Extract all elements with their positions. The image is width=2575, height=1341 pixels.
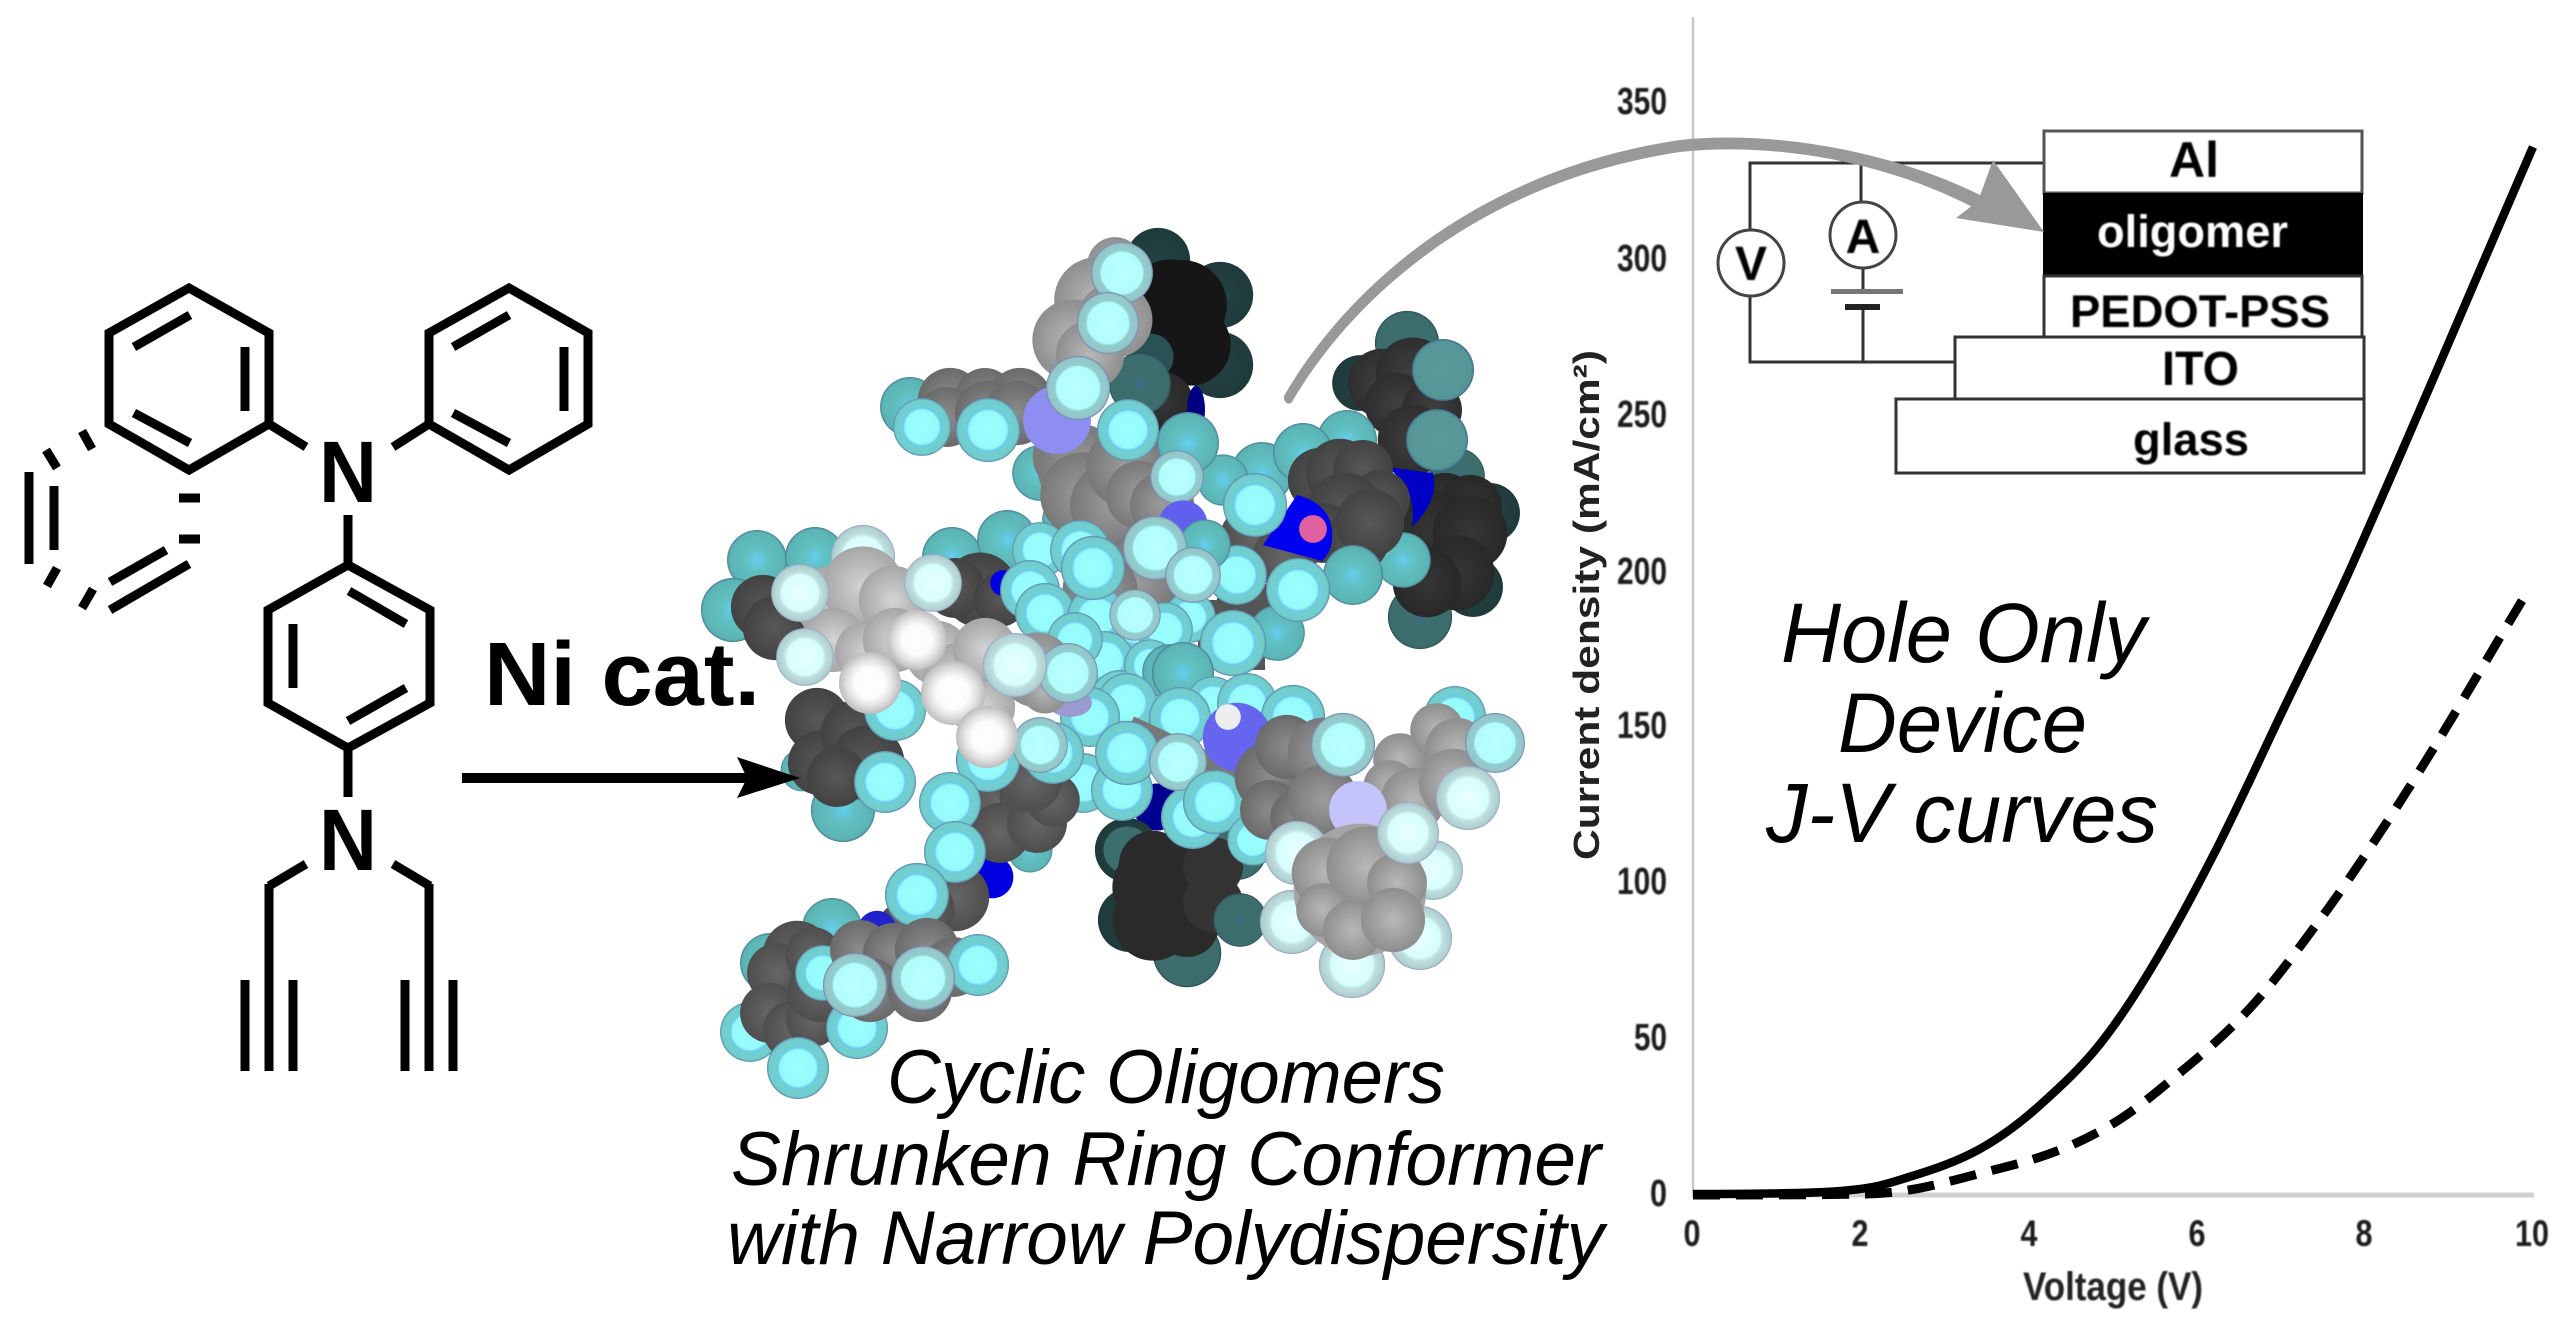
voltmeter	[1718, 230, 1784, 296]
upper left dark ring	[701, 492, 1098, 660]
y axis title: Current density (mA/cm²)	[1566, 350, 1607, 860]
glass layer: glass	[2133, 414, 2249, 465]
mid left dark ring	[781, 679, 926, 842]
y axis tick labels: 300	[1617, 238, 1667, 280]
Al layer	[2044, 131, 2362, 193]
device stack diagram	[1718, 131, 2364, 473]
x axis tick labels: 4	[2020, 1213, 2038, 1254]
oligomer layer	[2043, 193, 2363, 276]
x axis tick labels: 6	[2188, 1213, 2206, 1254]
dashed J-V curve	[1693, 594, 2526, 1195]
chart annotation: Hole Only	[1781, 586, 2151, 680]
ammeter	[1830, 202, 1896, 268]
back black ring top	[1066, 228, 1253, 434]
upper grey ring and stalk	[1023, 237, 1219, 548]
J-V chart	[1566, 17, 2549, 1309]
lower spoke dark ring	[879, 722, 1084, 946]
bonds to nitrogen atoms	[269, 424, 430, 886]
hydrogens behind central ring	[1197, 410, 1377, 506]
molecular model: cyclic oligomer	[701, 228, 1525, 1099]
molecule caption: Cyclic Oligomers	[887, 1035, 1445, 1120]
voltmeter: V	[1735, 238, 1767, 291]
pale ring at lower right	[1260, 781, 1463, 998]
propargyl arms	[269, 884, 429, 980]
x axis tick labels: 2	[1852, 1213, 1868, 1254]
dashed ring extension	[29, 431, 200, 610]
molecule caption: Shrunken Ring Conformer	[731, 1117, 1604, 1202]
reaction arrow	[462, 757, 800, 798]
chart annotation: Device	[1838, 676, 2087, 770]
PEDOT-PSS layer	[2044, 276, 2362, 337]
y axis tick labels: 50	[1634, 1017, 1667, 1059]
battery	[1831, 289, 1903, 310]
grey curved arrow	[1284, 138, 2044, 404]
left phenyl ring	[109, 288, 269, 470]
oligomer layer: oligomer	[2097, 206, 2288, 257]
nitrogen label upper: N	[319, 424, 377, 521]
foreground light ring	[771, 546, 1161, 773]
left grey ring	[880, 368, 1068, 501]
y axis tick labels	[1617, 81, 1667, 1215]
monomer structure	[29, 288, 588, 1071]
y axis tick labels: 250	[1617, 394, 1667, 436]
x axis tick labels: 0	[1684, 1213, 1700, 1254]
catalyst label: Ni cat.	[484, 625, 760, 725]
circuit wires	[1750, 163, 2044, 362]
y axis tick labels: 350	[1617, 81, 1667, 123]
right grey ring	[1227, 713, 1375, 866]
y axis tick labels: 150	[1617, 705, 1667, 747]
top right dark ring	[1332, 311, 1485, 504]
ammeter: A	[1846, 211, 1880, 264]
Al layer: Al	[2169, 132, 2219, 188]
central hydrogen cluster	[1000, 500, 1266, 730]
axes	[1692, 17, 1694, 1195]
solid J-V curve	[1693, 147, 2533, 1194]
x axis tick labels: 10	[2515, 1213, 2549, 1254]
far right grey ring	[1363, 686, 1525, 832]
nitrogen label lower: N	[319, 792, 377, 889]
bottom centre black ring	[1095, 783, 1279, 987]
lower central hydrogens and nitrogen	[1053, 642, 1325, 849]
PEDOT-PSS layer: PEDOT-PSS	[2070, 286, 2330, 337]
x axis tick labels	[1684, 1213, 2549, 1254]
molecule caption	[727, 1035, 1608, 1281]
y axis tick labels: 0	[1650, 1173, 1667, 1215]
x axis tick labels: 8	[2356, 1213, 2372, 1254]
y axis tick labels: 100	[1617, 861, 1667, 903]
molecule caption: with Narrow Polydispersity	[727, 1196, 1608, 1281]
central dark ring with bright nitrogen	[1198, 439, 1410, 670]
bottom left ring pair	[720, 898, 1009, 1099]
chart annotation	[1765, 586, 2158, 860]
right phenyl ring	[429, 288, 588, 470]
y axis tick labels: 200	[1617, 551, 1667, 593]
x axis title: Voltage (V)	[2023, 1265, 2203, 1309]
right dark ring and nitrogen	[1375, 467, 1520, 649]
central phenylene ring	[268, 565, 430, 748]
ITO layer: ITO	[2162, 343, 2239, 396]
glass layer	[1896, 399, 2364, 473]
right triple bond	[405, 980, 453, 1071]
chart annotation: J-V curves	[1765, 766, 2158, 860]
ITO layer	[1955, 337, 2364, 399]
left triple bond	[245, 980, 293, 1071]
